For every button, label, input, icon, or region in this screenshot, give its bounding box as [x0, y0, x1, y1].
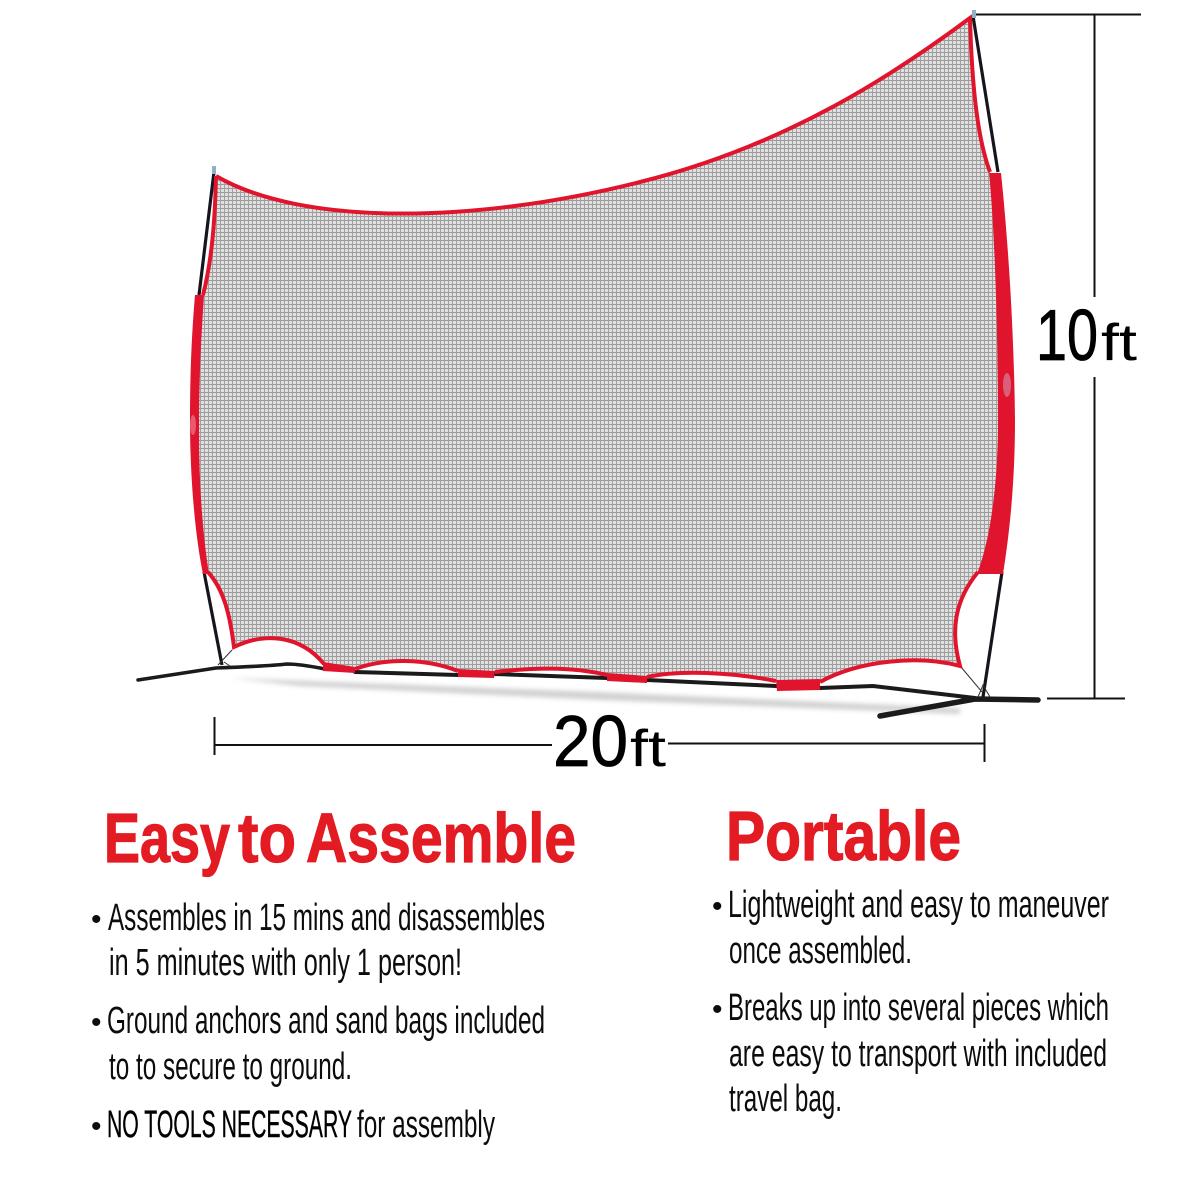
mesh panel [199, 18, 998, 682]
list: assembly features: NO TOOLS NECESSARY [107, 1104, 352, 1146]
list: assembly features: Ground anchors and sand bags included [107, 1000, 545, 1042]
list: assembly features: • [91, 1110, 102, 1143]
list: portability features: • [712, 993, 723, 1026]
heading: Easy to Assemble: Easy [104, 799, 230, 877]
red pole sleeves [190, 173, 1015, 691]
list: assembly features: Assembles in 15 mins and disassembles [108, 897, 545, 939]
height dimension: 10ft: ft [1101, 314, 1138, 372]
sleeve logos [1003, 373, 1011, 397]
list: assembly features: • [91, 903, 102, 936]
list: assembly features: in 5 minutes with only 1 person! [109, 942, 462, 984]
width dimension: 20ft: 20 [553, 702, 628, 782]
list: assembly features: • [91, 1006, 102, 1039]
list: assembly features [91, 897, 545, 1146]
height dimension: 10ft: 10 [1036, 296, 1098, 376]
left and right poles [199, 16, 1002, 697]
height dimension: 10ft [976, 14, 1145, 698]
heading: Easy to Assemble: to [238, 799, 296, 877]
width dimension: 20ft: ft [630, 720, 667, 778]
list: assembly features: to to secure to ground. [109, 1046, 352, 1088]
ground shadow [230, 678, 960, 714]
heading: Easy to Assemble: Assemble [306, 799, 576, 877]
list: portability features [712, 884, 1109, 1120]
width dimension: 20ft [214, 702, 984, 782]
list: assembly features: for assembly [357, 1104, 495, 1146]
heading: Easy to Assemble [104, 799, 576, 877]
list: portability features: once assembled. [729, 930, 912, 972]
heading: Portable: Portable [726, 797, 961, 875]
red net binding [203, 18, 990, 682]
batting net product illustration [138, 10, 1038, 716]
list: portability features: travel bag. [729, 1078, 842, 1120]
base frame [138, 664, 1038, 716]
pole tips [212, 10, 976, 174]
guy lines [218, 650, 990, 697]
list: portability features: • [712, 890, 723, 923]
